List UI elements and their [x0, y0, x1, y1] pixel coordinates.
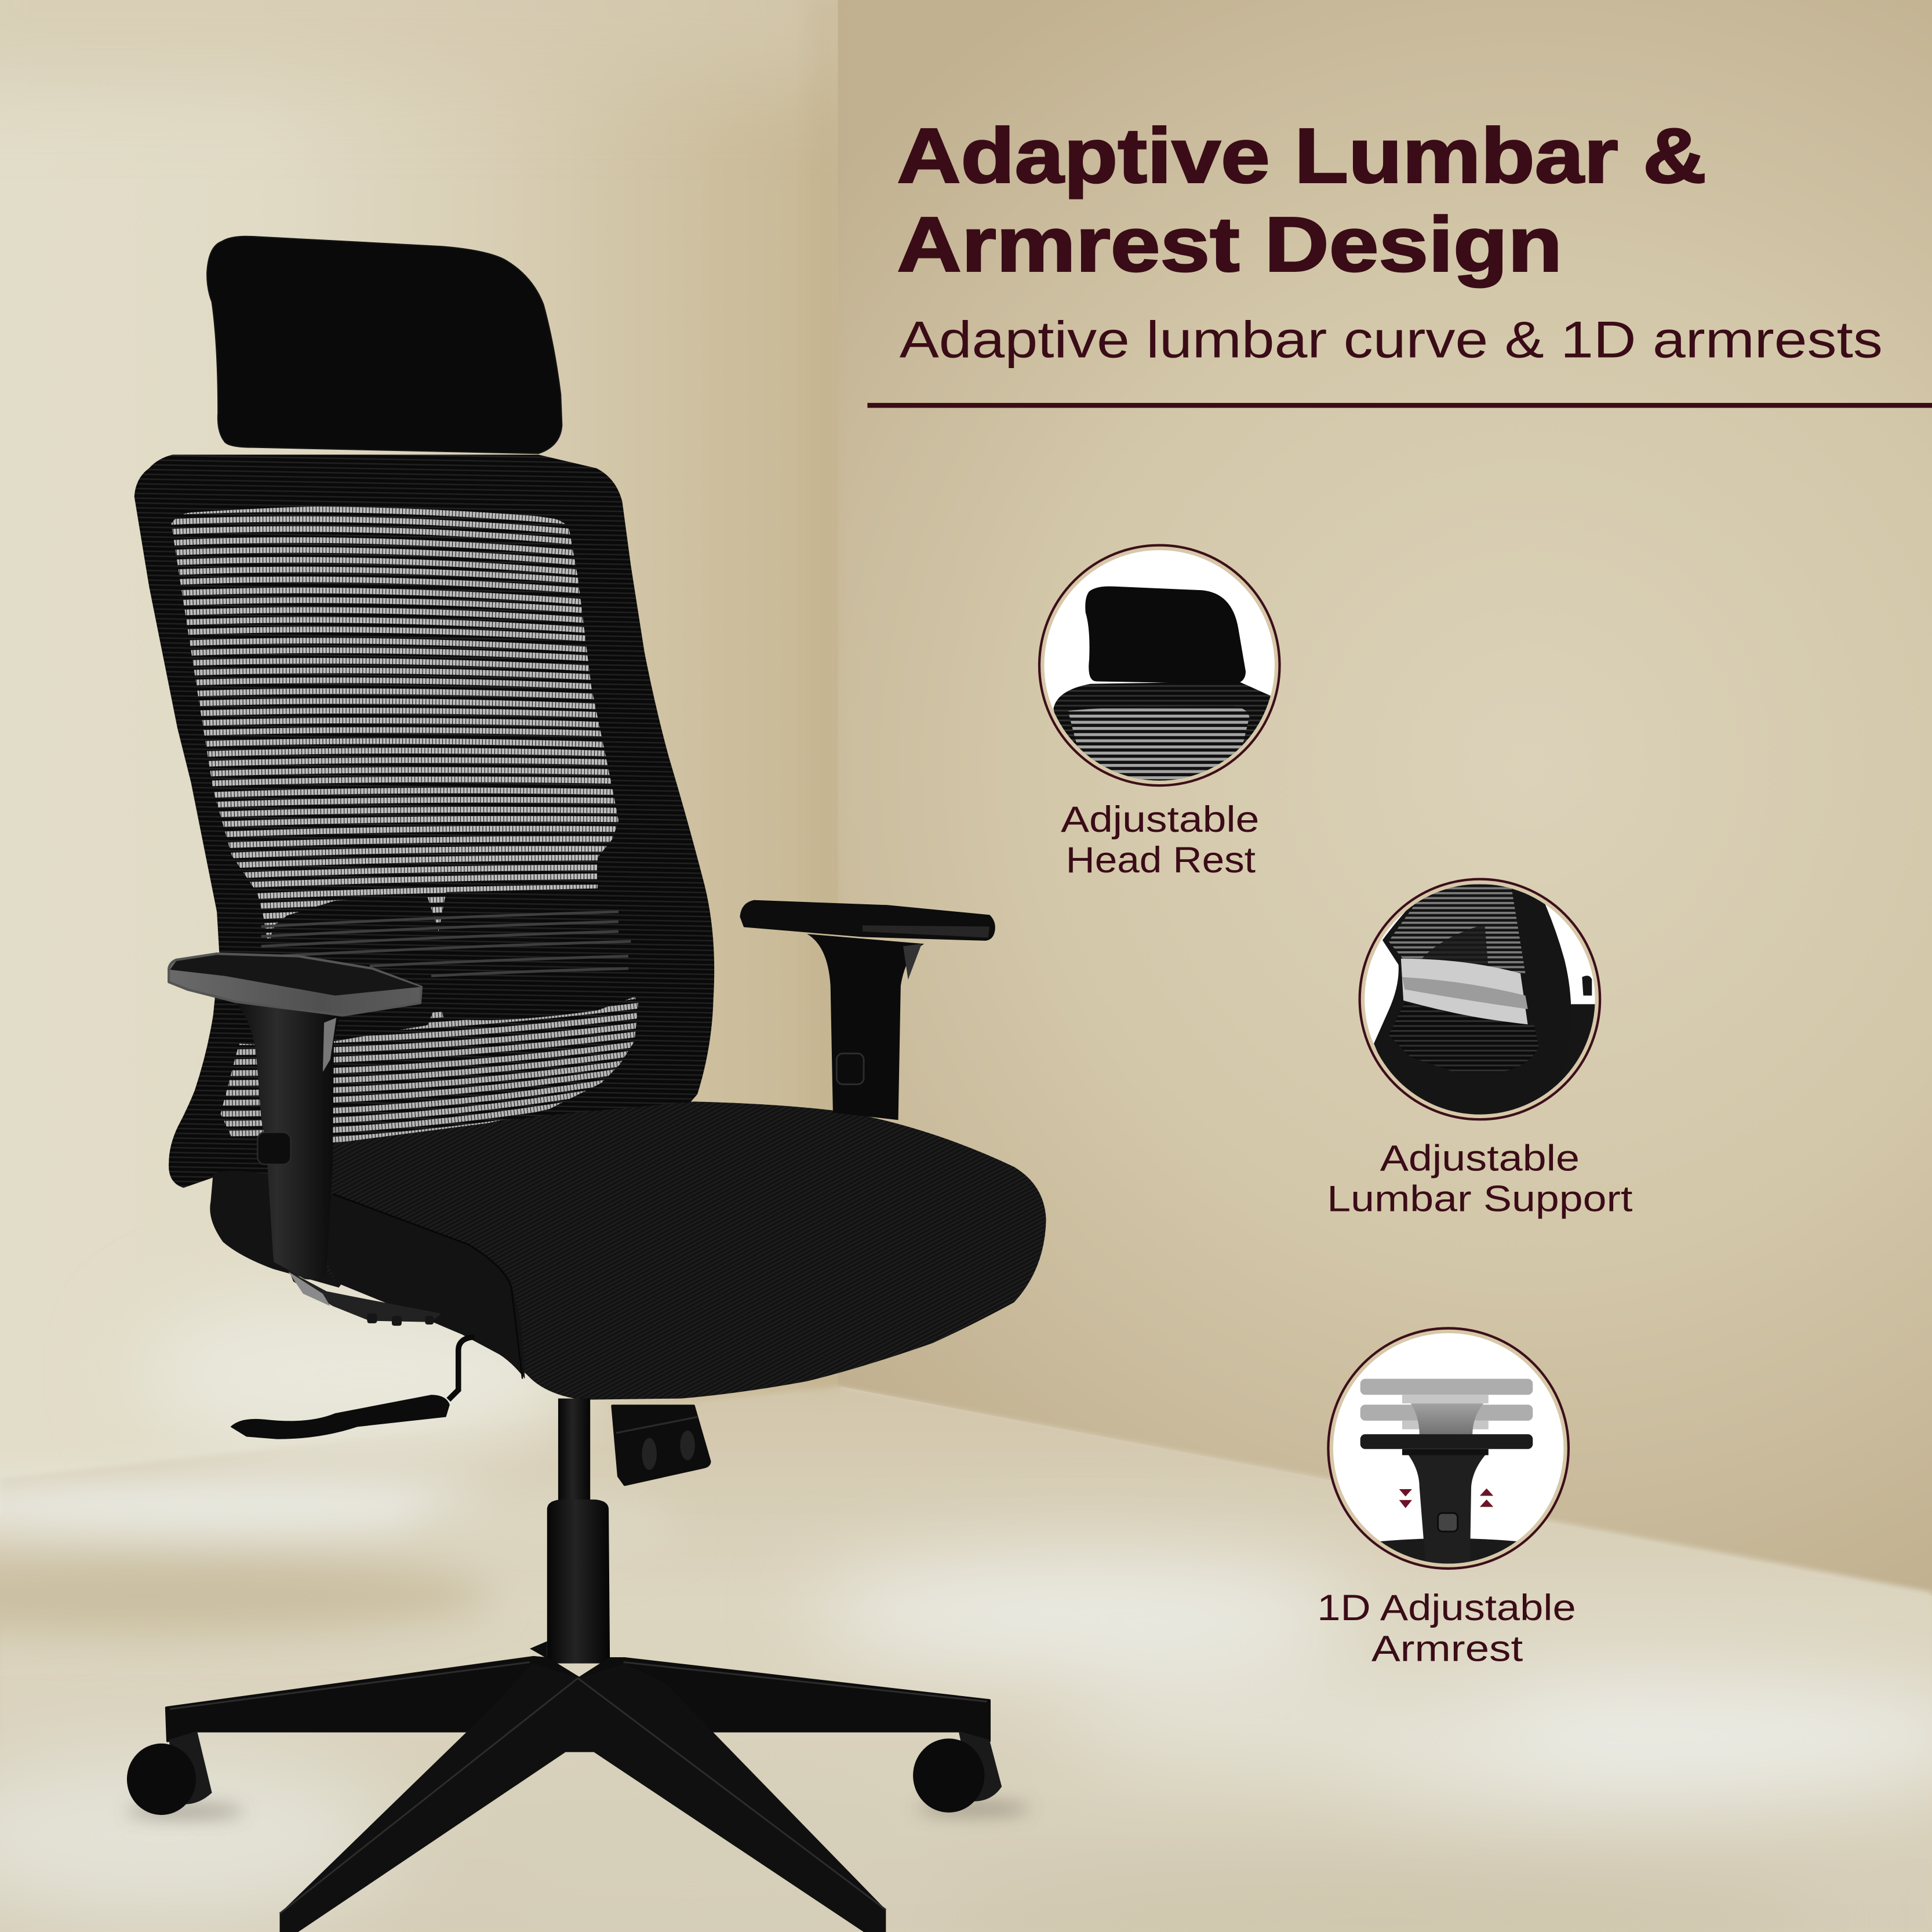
- label: adjustable lumbar support: Lumbar Support: [1327, 1179, 1632, 1220]
- floor: [0, 1386, 1932, 1932]
- near armrest: [169, 954, 421, 1279]
- seat behind frame: [1555, 1004, 1604, 1115]
- seat rear cushion: [210, 1171, 370, 1287]
- lower mesh: [1389, 1003, 1539, 1072]
- label: 1D adjustable armrest: 1D Adjustable: [1317, 1588, 1576, 1628]
- down arrows: [1399, 1489, 1412, 1508]
- ghost armrest positions: [1360, 1379, 1533, 1395]
- centre hub and front legs: [280, 1664, 886, 1932]
- seat in circle: [1380, 1538, 1518, 1577]
- label: adjustable head rest: Adjustable: [1061, 799, 1259, 840]
- title: Armrest Design: [897, 202, 1562, 288]
- seat side band: [314, 1194, 525, 1379]
- icon: head rest circle: [1039, 545, 1279, 788]
- icon: armrest height circle: [1328, 1328, 1569, 1577]
- pad shadow: [1417, 924, 1489, 969]
- up arrows: [1480, 1489, 1493, 1507]
- title: [897, 113, 1707, 288]
- glow under chair: [136, 1287, 604, 1460]
- tension knob: [612, 1406, 710, 1485]
- wall corner shadow: [807, 0, 838, 1392]
- label: 1D adjustable armrest: [1317, 1588, 1576, 1669]
- right wall: [838, 0, 1932, 1596]
- feature: adjustable lumbar support: [1327, 879, 1632, 1220]
- far armrest post: [807, 934, 924, 1120]
- right caster: [913, 1731, 1002, 1813]
- icon: lumbar support circle: [1360, 879, 1604, 1119]
- gas column upper: [558, 1399, 590, 1504]
- product photo: office chair: [126, 237, 1046, 1932]
- title divider: [867, 403, 1932, 408]
- armrest post: [1406, 1451, 1489, 1565]
- left wall: [0, 0, 841, 1516]
- seat seam: [333, 1194, 522, 1379]
- lumbar band: [1402, 977, 1528, 1009]
- label: adjustable lumbar support: [1327, 1138, 1632, 1220]
- title: Adaptive Lumbar &: [897, 113, 1707, 199]
- chair back frame: [134, 454, 714, 1188]
- lumbar pad stripes: [261, 912, 631, 976]
- gas column lower: [547, 1500, 610, 1664]
- lumbar plate: [1401, 959, 1528, 1025]
- five-star base: [166, 1641, 989, 1932]
- near armrest post: [235, 1002, 339, 1279]
- far armrest pad: [741, 901, 995, 940]
- height lock button: [257, 1132, 291, 1165]
- label: 1D adjustable armrest: Armrest: [1371, 1628, 1523, 1669]
- floor light and shade: [0, 1476, 1932, 1932]
- subtitle: Adaptive lumbar curve & 1D armrests: [900, 310, 1883, 368]
- button: [1438, 1513, 1458, 1531]
- label: adjustable head rest: [1061, 799, 1259, 881]
- caster shadows: [126, 1802, 1030, 1818]
- label: adjustable lumbar support: Adjustable: [1380, 1138, 1580, 1178]
- active armrest pad: [1360, 1434, 1533, 1449]
- seat cushion: [296, 1101, 1046, 1400]
- frame silhouette: [1374, 885, 1571, 1115]
- head rest: [207, 237, 562, 453]
- left rear leg: [166, 1657, 579, 1741]
- recline lever: [230, 1337, 474, 1439]
- feature: adjustable head rest: [1039, 545, 1279, 881]
- seat mechanism: [288, 1272, 441, 1326]
- near armrest pad: [169, 954, 421, 1016]
- base highlights: [170, 1662, 987, 1913]
- far armrest: [741, 901, 995, 1120]
- left wall top shading: [0, 0, 863, 86]
- left caster: [127, 1731, 212, 1815]
- right rear leg: [579, 1658, 989, 1741]
- label: adjustable head rest: Head Rest: [1066, 840, 1256, 881]
- feature: 1D adjustable armrest: [1317, 1328, 1576, 1669]
- mesh panel: [160, 510, 641, 1165]
- upper mesh: [1389, 882, 1526, 973]
